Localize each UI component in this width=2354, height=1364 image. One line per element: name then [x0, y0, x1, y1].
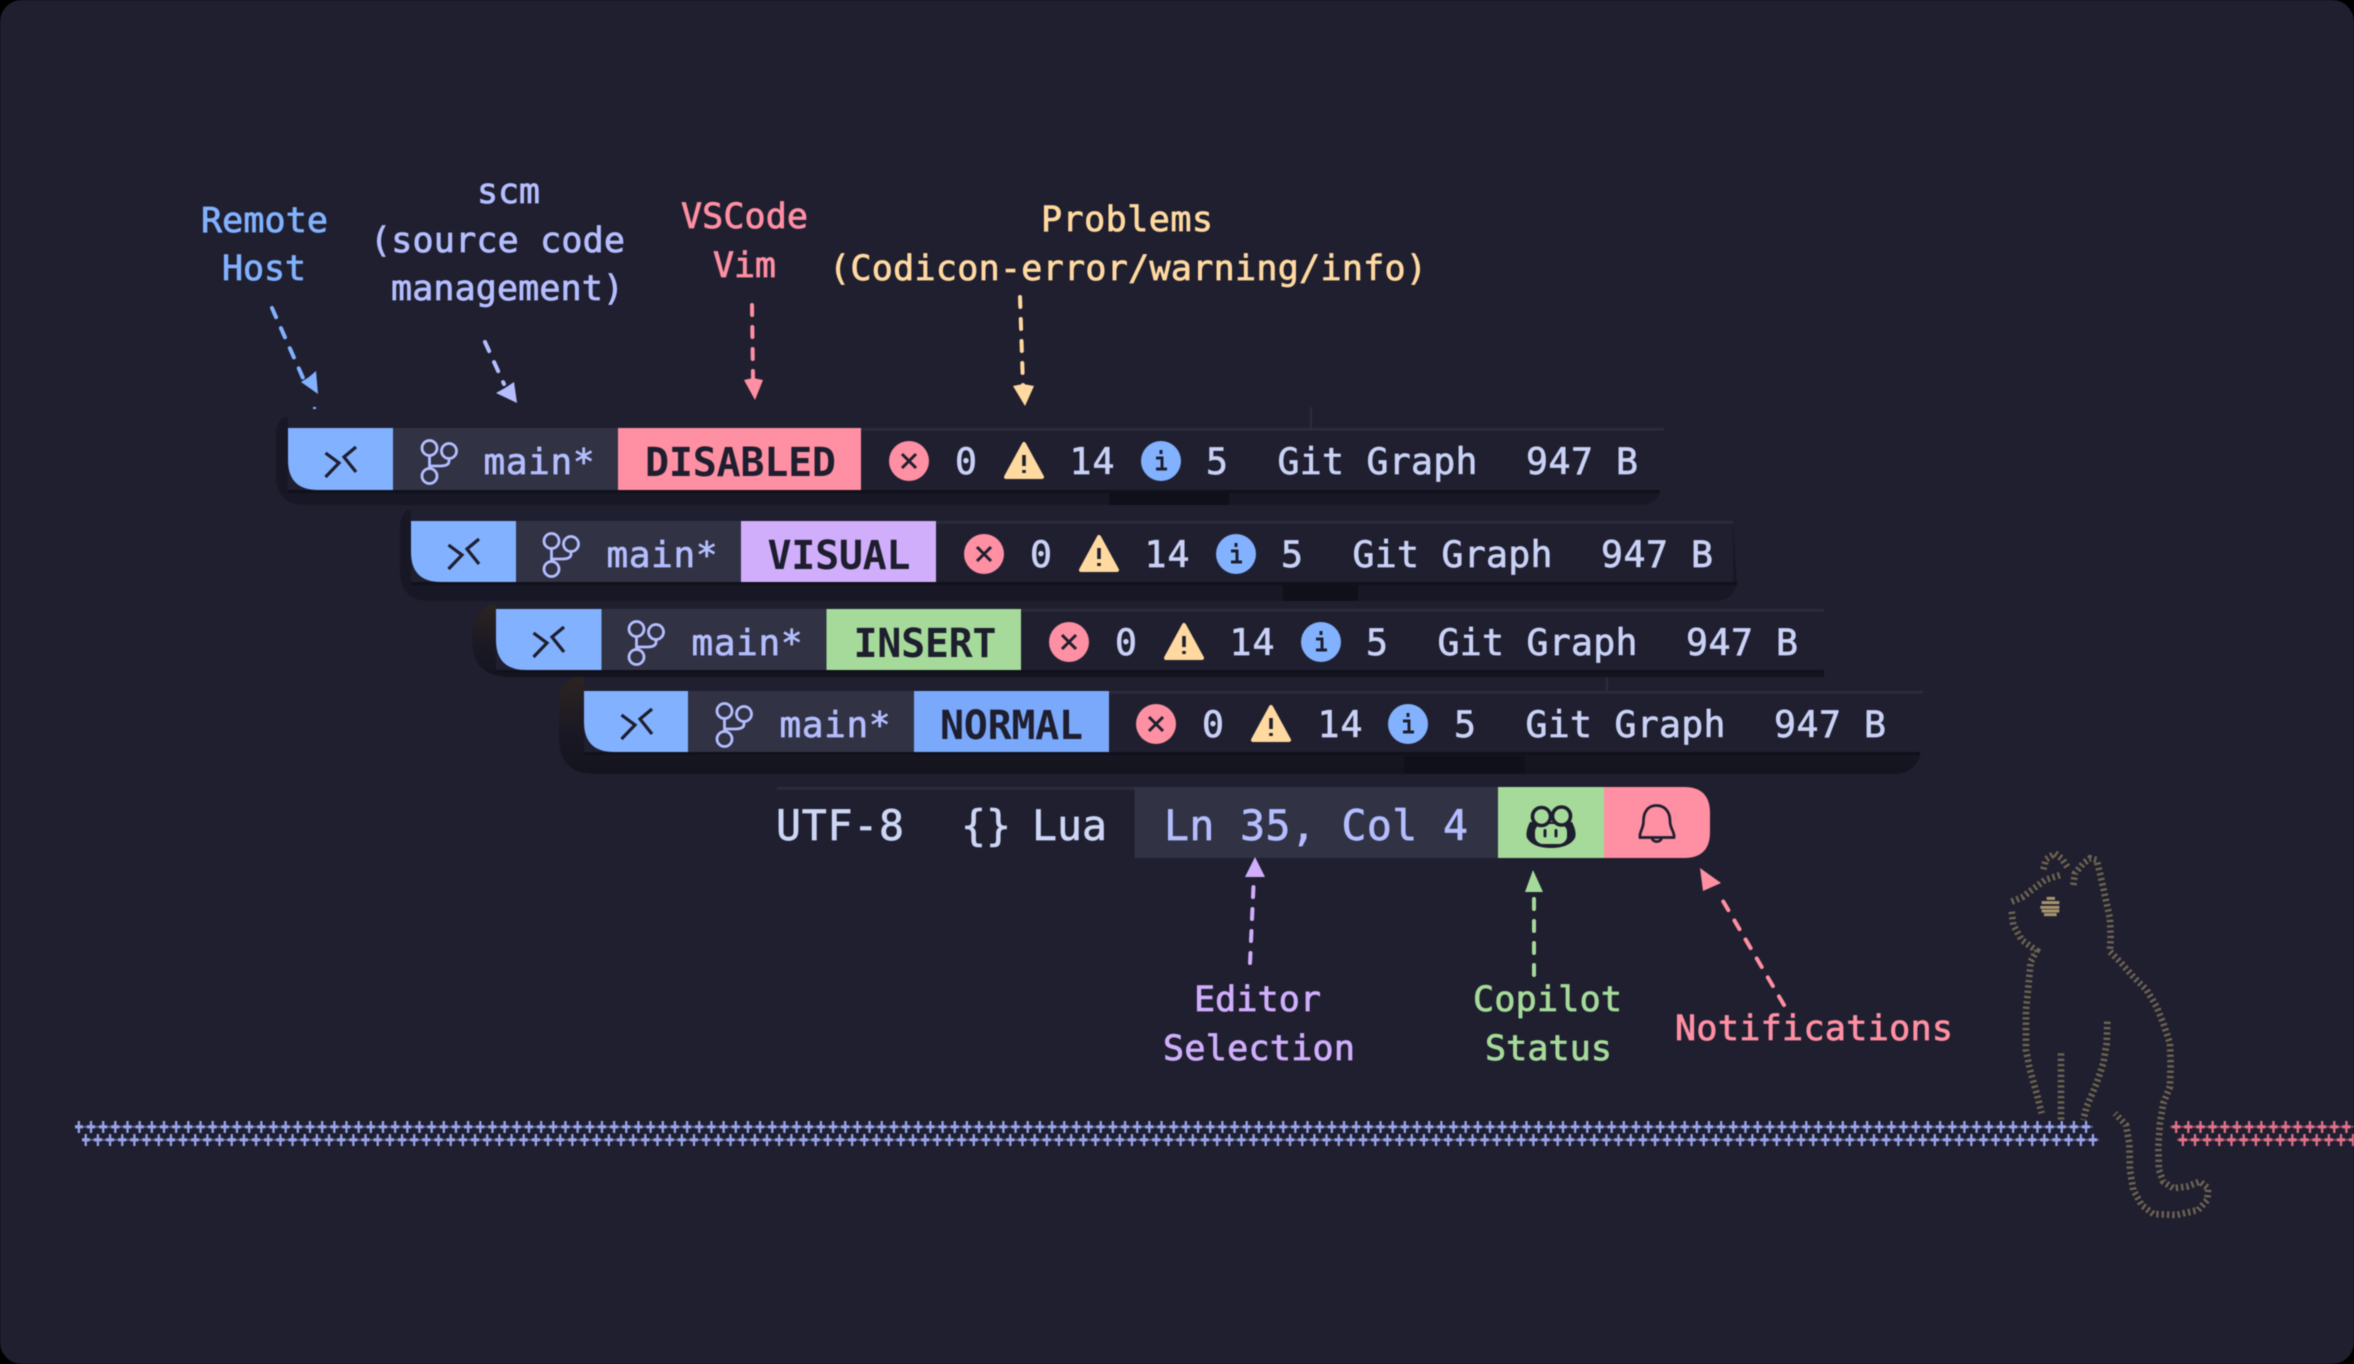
label: Problems: (Codicon-error/warning/info)	[829, 249, 1427, 289]
arrow: VSCode Vim	[744, 305, 763, 400]
label: Problems	[829, 200, 1427, 289]
arrow: Editor Selection	[1245, 857, 1265, 963]
label: Remote Host: Remote	[201, 201, 328, 241]
vim mode: INSERT	[826, 609, 1021, 670]
problems and items: Git Graph	[1526, 703, 1726, 746]
status bar: DISABLED	[276, 407, 1664, 505]
problems and items: 0	[1202, 703, 1224, 746]
scm segment: main*	[484, 442, 594, 483]
label: scm	[370, 172, 625, 309]
problems and items: 0	[1030, 533, 1052, 576]
status bar: INSERT	[472, 605, 1824, 677]
problems and items	[964, 533, 1713, 576]
language: {}	[961, 801, 1011, 850]
scm segment	[516, 521, 741, 582]
label: VSCode Vim: Vim	[713, 246, 776, 286]
problems and items: 14	[1230, 621, 1274, 664]
scm segment	[688, 691, 914, 752]
problems and items: Git Graph	[1352, 533, 1552, 576]
problems and items: 947 B	[1601, 533, 1713, 576]
problems and items	[889, 440, 1638, 483]
copilot segment	[1498, 787, 1604, 858]
vim mode: NORMAL: NORMAL	[940, 703, 1083, 749]
problems and items: 0	[955, 440, 977, 483]
arrow: Problems	[1013, 297, 1034, 406]
label: Copilot Status: Status	[1485, 1029, 1612, 1069]
scm segment: main*	[780, 705, 890, 746]
arrow: Remote Host	[272, 308, 318, 409]
label: Editor Selection	[1163, 980, 1355, 1069]
label: Copilot Status	[1473, 980, 1622, 1069]
remote segment	[584, 691, 688, 752]
arrow: Copilot Status	[1525, 870, 1543, 975]
label: Copilot Status: Copilot	[1473, 980, 1622, 1020]
label: Remote Host	[201, 201, 328, 289]
status bar: NORMAL	[559, 677, 1923, 774]
remote segment	[496, 609, 602, 670]
problems and items: Git Graph	[1438, 621, 1638, 664]
problems and items: Git Graph	[1278, 440, 1478, 483]
problems and items: 5	[1366, 621, 1388, 664]
vim mode: DISABLED	[618, 428, 861, 490]
problems and items: 14	[1318, 703, 1362, 746]
label: Notifications: Notifications	[1675, 1009, 1953, 1049]
remote segment	[288, 428, 393, 490]
scm segment	[602, 609, 826, 670]
remote segment	[411, 521, 516, 582]
scm segment	[393, 428, 618, 490]
problems and items: 947 B	[1526, 440, 1638, 483]
vim mode: VISUAL: VISUAL	[768, 533, 910, 579]
label: scm: management)	[391, 269, 624, 309]
ascii cat	[2012, 853, 2208, 1215]
vim mode: INSERT: INSERT	[854, 621, 996, 667]
label: VSCode Vim	[681, 197, 808, 286]
problems and items	[1049, 621, 1798, 664]
ascii ground line: pink	[2170, 1120, 2354, 1147]
vim mode: VISUAL	[741, 521, 936, 582]
label: scm: (source code	[370, 221, 625, 261]
vim mode: DISABLED: DISABLED	[645, 440, 836, 486]
problems and items: 947 B	[1774, 703, 1886, 746]
notifications segment	[1604, 787, 1710, 858]
language	[961, 801, 1107, 850]
arrow: scm	[485, 342, 517, 403]
label: Problems: Problems	[1041, 200, 1213, 240]
ascii ground line: blue	[75, 1120, 2099, 1147]
problems and items: 5	[1454, 703, 1476, 746]
status bar: VISUAL	[400, 510, 1737, 601]
label: VSCode Vim: VSCode	[681, 197, 808, 237]
problems and items: 947 B	[1686, 621, 1798, 664]
problems and items	[1136, 703, 1886, 746]
label: scm: scm	[477, 172, 540, 212]
vim mode: NORMAL	[914, 691, 1109, 752]
problems and items: 5	[1206, 440, 1228, 483]
language: Lua	[1032, 801, 1107, 850]
problems and items: 14	[1070, 440, 1114, 483]
problems and items: 5	[1281, 533, 1303, 576]
status bar: right side	[776, 787, 1710, 858]
label: Editor Selection: Editor	[1194, 980, 1321, 1020]
label: Remote Host: Host	[222, 249, 306, 289]
scm segment: main*	[606, 535, 718, 576]
editor selection segment	[1134, 787, 1498, 858]
arrow: Notifications	[1700, 868, 1784, 1005]
label: Editor Selection: Selection	[1163, 1029, 1355, 1069]
problems and items: 14	[1144, 533, 1190, 576]
problems and items: 0	[1115, 621, 1137, 664]
editor selection segment: Ln 35, Col 4	[1164, 801, 1468, 850]
scm segment: main*	[692, 623, 802, 664]
encoding: UTF-8	[776, 801, 904, 850]
